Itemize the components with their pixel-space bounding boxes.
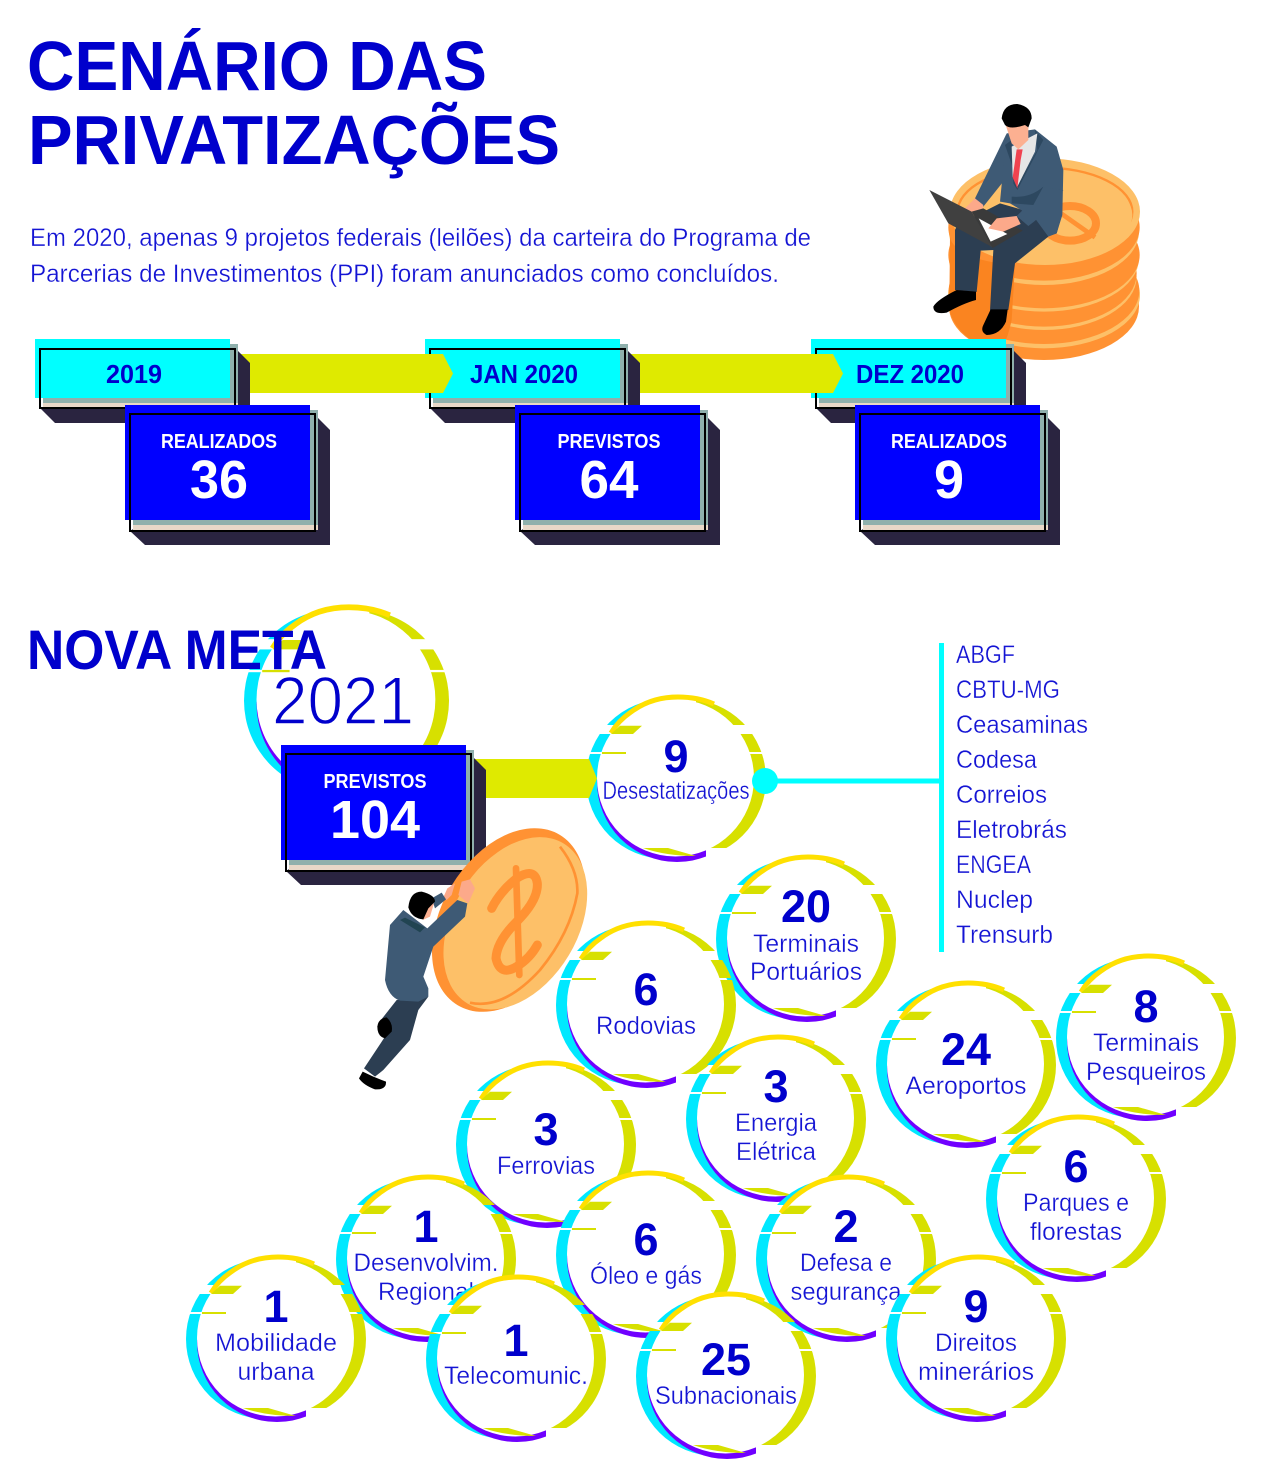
circle: 24 aeroportos: 24 <box>941 1024 991 1075</box>
circle: 20 terminais portuarios: Terminais <box>753 930 859 958</box>
title <box>27 27 560 179</box>
circle: 3 energia eletrica <box>686 1037 866 1202</box>
circle: 6 parques e florestas: florestas <box>1030 1218 1122 1246</box>
circle: 1 desenvolvimento regional: Regional <box>378 1278 474 1306</box>
panel: 2019 label <box>35 339 250 423</box>
circle: 9 direitos minerarios: minerários <box>918 1358 1034 1386</box>
heading: nova meta: NOVA META <box>27 618 327 681</box>
list: companies: Trensurb <box>956 921 1053 949</box>
connector dot <box>752 768 778 794</box>
circle: 8 terminais pesqueiros: Pesqueiros <box>1086 1058 1206 1086</box>
arrow: previstos to desestatizacoes <box>470 759 597 798</box>
panel: realizados 9: REALIZADOS <box>891 431 1007 453</box>
list: companies: Ceasaminas <box>956 711 1088 739</box>
panel: Dez 2020 label <box>811 339 1026 423</box>
panel: previstos 64: 64 <box>580 450 638 510</box>
panel: realizados 36: 36 <box>190 450 248 510</box>
circle: 6 rodovias: 6 <box>633 964 659 1015</box>
list: companies: Correios <box>956 781 1047 809</box>
circle: desestatizacoes: Desestatizações <box>602 777 750 805</box>
circle: 1 desenvolvimento regional: 1 <box>413 1201 439 1252</box>
circle: 1 mobilidade urbana: urbana <box>238 1358 315 1386</box>
circle: 3 energia eletrica: Elétrica <box>736 1138 816 1166</box>
circle: 1 desenvolvimento regional <box>336 1177 516 1342</box>
list: companies: Eletrobrás <box>956 816 1067 844</box>
circle: 1 desenvolvimento regional: Desenvolvim. <box>354 1249 498 1277</box>
circle: 9 direitos minerarios: Direitos <box>935 1329 1017 1357</box>
circle: 3 energia eletrica: 3 <box>763 1061 789 1112</box>
circle: 3 ferrovias: Ferrovias <box>497 1152 595 1180</box>
circle: 1 mobilidade urbana <box>186 1257 366 1422</box>
circle: 8 terminais pesqueiros: 8 <box>1133 981 1159 1032</box>
circle: 6 parques e florestas <box>986 1117 1166 1282</box>
circle: 1 telecomunicacoes: Telecomunic. <box>444 1362 588 1390</box>
list: companies <box>939 641 1088 952</box>
circle: desestatizacoes <box>586 697 766 862</box>
circle: 25 subnacionais: 25 <box>701 1334 751 1385</box>
panel: realizados 36 <box>125 405 330 545</box>
panel: realizados 9: 9 <box>934 450 964 510</box>
circle: 1 telecomunicacoes: 1 <box>503 1315 529 1366</box>
list: companies: Codesa <box>956 746 1037 774</box>
intro text: Parcerias de Investimentos (PPI) foram anunciados como concluídos. <box>30 260 779 288</box>
icon: man pushing giant coin <box>359 801 617 1089</box>
intro text: Em 2020, apenas 9 projetos federais (leilões) da carteira do Programa de <box>30 224 811 252</box>
circle: 6 rodovias <box>556 923 736 1088</box>
panel: previstos 64: PREVISTOS <box>558 431 660 453</box>
title: PRIVATIZAÇÕES <box>28 101 560 179</box>
circle: 2021: 2021 <box>272 663 414 739</box>
circle: 25 subnacionais: Subnacionais <box>655 1382 797 1410</box>
title: CENÁRIO DAS <box>27 27 487 105</box>
circle: 6 parques e florestas: Parques e <box>1023 1189 1129 1217</box>
circle: 24 aeroportos <box>876 983 1056 1148</box>
circle: 6 oleo e gas: 6 <box>633 1214 659 1265</box>
list: companies: ENGEA <box>956 851 1031 879</box>
circle: 6 oleo e gas <box>556 1173 736 1338</box>
circle: 25 subnacionais <box>636 1294 816 1459</box>
panel: Jan 2020 label <box>425 339 640 423</box>
arrow: 2019 to Jan 2020 <box>240 354 453 393</box>
circle: 3 ferrovias <box>456 1063 636 1228</box>
panel: 2019 label: 2019 <box>106 359 162 389</box>
circle: 2021 <box>244 607 449 795</box>
circle: 3 energia eletrica: Energia <box>735 1109 817 1137</box>
circle: 6 oleo e gas: Óleo e gás <box>590 1261 702 1290</box>
circle: 2 defesa e seguranca: Defesa e <box>800 1249 892 1277</box>
icon: businessman with laptop on coin stack <box>929 104 1140 360</box>
panel: previstos 104 <box>281 745 486 885</box>
circle: 2 defesa e seguranca: segurança <box>790 1278 902 1306</box>
connector line to list <box>765 778 940 784</box>
panel: Jan 2020 label: JAN 2020 <box>470 359 578 389</box>
circle: 24 aeroportos: Aeroportos <box>906 1072 1026 1100</box>
circle: 6 rodovias: Rodovias <box>596 1012 696 1040</box>
circle: desestatizacoes: 9 <box>663 731 689 782</box>
circle: 1 mobilidade urbana: 1 <box>263 1281 289 1332</box>
circle: 8 terminais pesqueiros <box>1056 956 1236 1121</box>
list: companies: Nuclep <box>956 886 1033 914</box>
panel: previstos 64 <box>515 405 720 545</box>
circle: 3 ferrovias: 3 <box>533 1104 559 1155</box>
circle: 20 terminais portuarios: Portuários <box>750 958 862 986</box>
panel: previstos 104: 104 <box>330 790 420 850</box>
panel: Dez 2020 label: DEZ 2020 <box>856 359 964 389</box>
list: companies: ABGF <box>956 641 1015 669</box>
list: companies: CBTU-MG <box>956 676 1060 704</box>
circle: 20 terminais portuarios: 20 <box>781 881 831 932</box>
panel: previstos 104: PREVISTOS <box>324 771 426 793</box>
circle: 1 mobilidade urbana: Mobilidade <box>215 1329 337 1357</box>
intro text <box>30 224 811 288</box>
panel: realizados 36: REALIZADOS <box>161 431 277 453</box>
arrow: Jan 2020 to Dez 2020 <box>630 354 843 393</box>
circle: 2 defesa e seguranca <box>756 1177 936 1342</box>
circle: 9 direitos minerarios: 9 <box>963 1281 989 1332</box>
circle: 20 terminais portuarios <box>716 857 896 1022</box>
circle: 8 terminais pesqueiros: Terminais <box>1093 1029 1199 1057</box>
circle: 9 direitos minerarios <box>886 1257 1066 1422</box>
panel: realizados 9 <box>855 405 1060 545</box>
circle: 2 defesa e seguranca: 2 <box>833 1201 859 1252</box>
circle: 1 telecomunicacoes <box>426 1277 606 1442</box>
circle: 6 parques e florestas: 6 <box>1063 1141 1089 1192</box>
